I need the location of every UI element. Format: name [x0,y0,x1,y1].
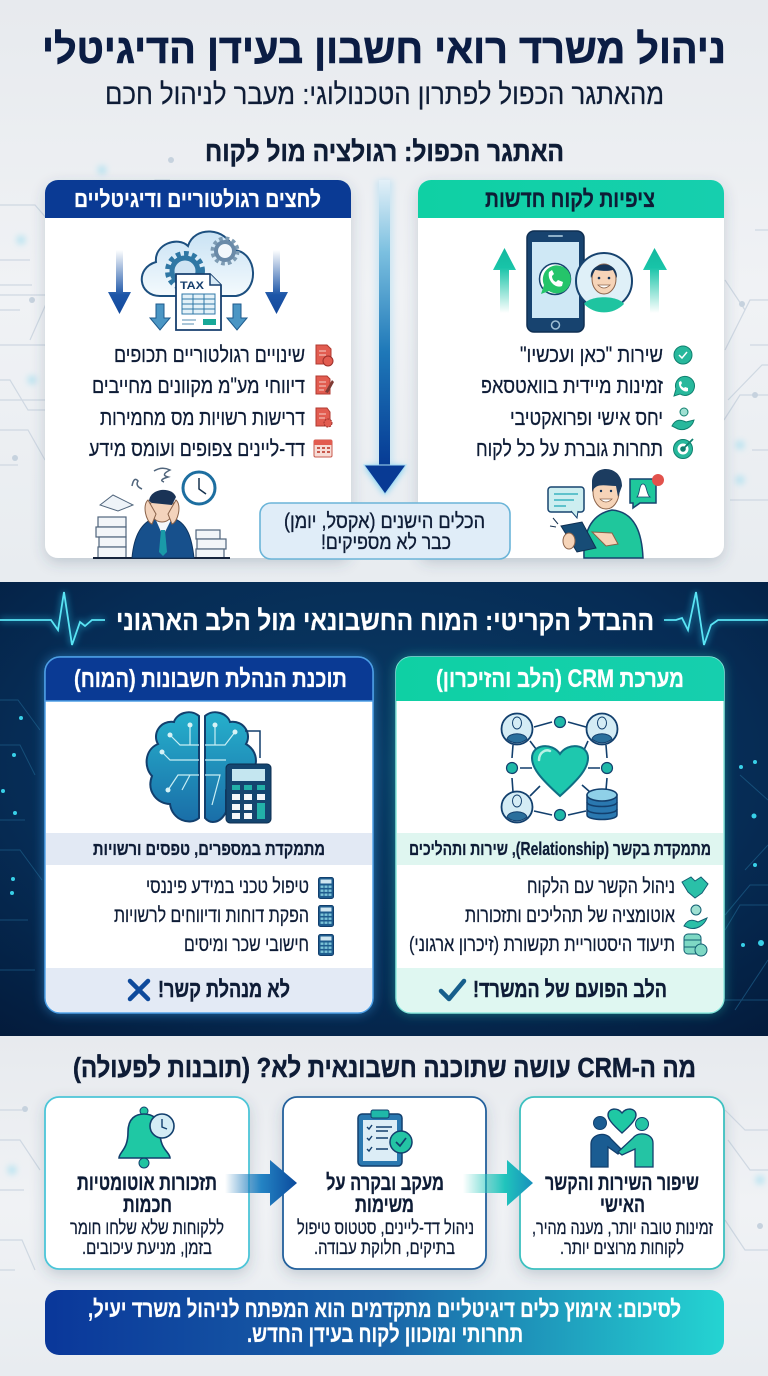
icon: calculator [318,878,334,898]
card: tracking and control [283,1097,486,1269]
card title: תזכורות אוטומטיות [77,1170,217,1195]
card body: ניהול דד-ליינים, סטטוס טיפול [297,1217,474,1239]
list item 3: תיעוד היסטוריית תקשורת (זיכרון ארגוני) [409,933,675,956]
list: regulatory items [89,342,334,461]
list item 3: יחס אישי ופרואקטיבי [510,405,663,430]
card body: בזמן, מניעת עיכובים. [82,1237,212,1259]
background: light upper area [0,0,768,582]
panel subtitle: מתמקדת בקשר (Relationship), שירות ותהליכים [409,839,711,859]
section: critical difference dark band [0,582,768,1036]
heading: critical difference: ההבדל הקריטי: המוח החשבונאי מול הלב הארגוני [116,605,654,636]
callout: old tools [260,503,510,559]
callout line 2: כבר לא מספיקים! [321,531,451,554]
icon: document edit [316,376,334,394]
list item 4: תחרות גוברת על כל לקוח [476,436,663,461]
card body [70,1217,224,1259]
panel: accounting software (brain) [45,657,373,1013]
list item 3: חישובי שכר ומיסים [184,933,309,956]
card title [326,1170,444,1217]
list: accounting functions [114,875,334,956]
card title [77,1170,217,1217]
callout line 1: הכלים הישנים (אקסל, יומן) [284,510,485,533]
panel heading: ציפיות לקוח חדשות [485,186,655,213]
summary banner [45,1290,724,1355]
pulse line: right [664,592,768,645]
card body: ללקוחות שלא שלחו חומר [70,1217,224,1239]
list item 1: ניהול הקשר עם הלקוח [527,875,675,898]
verdict: no relationship management: לא מנהלת קשר! [158,976,290,1002]
icon: bell with clock [119,1107,174,1168]
arrow: between middle and right cards [463,1160,533,1206]
pulse line: left [0,592,105,645]
icon: CRM network with heart [502,714,618,822]
card title: משימות [355,1192,414,1217]
panel: regulatory pressures [45,180,351,558]
summary line 2: תחרותי ומוכוון לקוח בעידן החדש. [247,1321,523,1348]
icon: calculator [318,906,334,926]
icon: hand with coin [684,905,707,929]
card body [297,1217,474,1259]
icon: stressed accountant [93,468,230,558]
list item 2: דיווחי מע"מ מקוונים מחייבים [92,373,305,398]
icon: check mark [441,981,464,999]
card title: חכמות [123,1192,172,1217]
card body [532,1217,714,1259]
arrow: central downward arrow [364,180,406,495]
panel subtitle: מתמקדת במספרים, טפסים ורשויות [93,839,325,859]
panel heading: לחצים רגולטוריים ודיגיטליים [74,186,321,212]
list item 1: שירות "כאן ועכשיו" [520,342,663,367]
list item 4: דד-ליינים צפופים ועומס מידע [89,436,305,461]
card body: בתיקים, חלוקת עבודה. [314,1237,455,1259]
list item 1: שינויים רגולטוריים תכופים [114,342,305,367]
heading: double challenge: האתגר הכפול: רגולציה מול לקוח [205,136,564,167]
panel heading: תוכנת הנהלת חשבונות (המוח) [74,665,347,693]
card title: האישי [600,1192,645,1217]
icon: phone with WhatsApp and client [493,231,667,332]
list item 2: אוטומציה של תהליכים ותזכורות [465,904,675,927]
list item 2: הפקת דוחות ודיווחים לרשויות [114,904,309,927]
card: smart reminders [45,1097,249,1269]
subtitle: מהאתגר הכפול לפתרון הטכנולוגי: מעבר לניהול חכם [105,79,664,111]
title: ניהול משרד רואי חשבון בעידן הדיגיטלי [42,26,726,72]
icon: calculator [318,934,334,956]
icon: X mark [130,981,148,999]
icon: brain and calculator [147,712,271,823]
card title: שיפור השירות והקשר [545,1170,699,1195]
list item 3: דרישות רשויות מס מחמירות [100,405,305,430]
background: light lower area [0,1036,768,1376]
icon: chat phone [674,376,694,396]
heading: what CRM does: מה ה-CRM עושה שתוכנה חשבונאית לא? (תובנות לפעולה) [73,1052,696,1083]
panel: CRM system (heart) [396,657,724,1013]
panel: new client expectations [418,180,724,558]
verdict: beating heart: הלב הפועם של המשרד! [473,976,667,1002]
icon: checklist clipboard [358,1110,412,1166]
icon: handshake with heart [591,1109,653,1167]
icon: database [684,934,707,956]
icon: tax cloud illustration [108,231,288,330]
list item 1: טיפול טכני במידע פיננסי [146,875,309,898]
icon: target [674,439,693,458]
icon: client using tablet [548,469,664,558]
list: CRM functions [409,875,708,956]
list: client items [476,342,694,461]
card title: מעקב ובקרה על [326,1170,444,1195]
card: improved service [520,1097,724,1269]
icon: handshake [682,877,708,898]
list item 2: זמינות מיידית בוואטסאפ [481,373,663,398]
icon: caring hand [672,408,694,430]
icon: document gear [316,408,332,427]
icon: verified check [674,346,692,364]
arrow: between left and middle cards [225,1160,297,1206]
panel heading: מערכת CRM (הלב והזיכרון) [436,665,684,693]
icon: tax cloud illustration: TAX [180,280,205,292]
icon: calendar [314,440,332,457]
card title [545,1170,699,1217]
icon: document alert [316,345,333,366]
card body: לקוחות מרוצים יותר. [560,1237,684,1259]
